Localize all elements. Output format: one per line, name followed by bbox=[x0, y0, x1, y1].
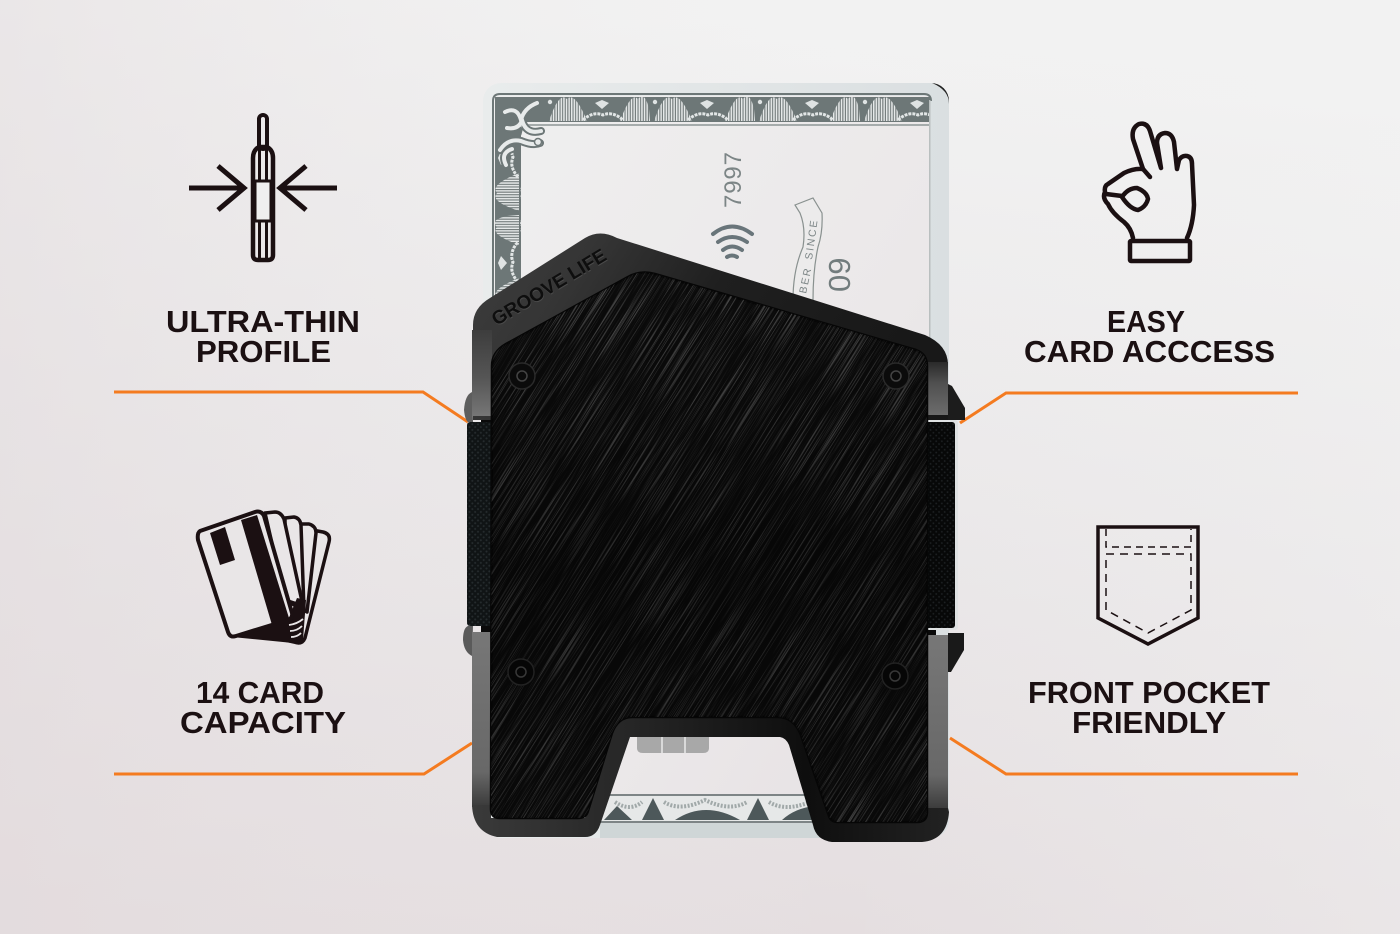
elastic strap right bbox=[925, 420, 958, 630]
screw top right bbox=[883, 363, 909, 389]
screw top left bbox=[509, 363, 535, 389]
engraved brand name: GROOVE LIFE bbox=[489, 246, 611, 331]
heading: ultra-thin profile: ULTRA-THIN bbox=[166, 304, 360, 339]
card chip contacts bbox=[637, 737, 709, 753]
wallet side tabs bbox=[463, 384, 965, 672]
heading: ultra-thin profile: PROFILE bbox=[196, 334, 331, 369]
brushed black plate bbox=[491, 273, 927, 822]
icon: OK hand gesture bbox=[1104, 124, 1194, 261]
wallet rail upper right bbox=[927, 362, 948, 415]
heading: front pocket friendly: FRONT POCKET bbox=[1028, 675, 1270, 710]
heading: 14 card capacity bbox=[180, 675, 346, 740]
card bottom border bbox=[600, 795, 825, 839]
member since ribbon: SINCE bbox=[803, 218, 821, 260]
heading: 14 card capacity: CAPACITY bbox=[180, 705, 346, 740]
heading: easy card access: EASY bbox=[1107, 304, 1185, 339]
leader line: easy card access bbox=[960, 393, 1298, 423]
heading: easy card access: CARD ACCCESS bbox=[1024, 334, 1275, 369]
heading: easy card access bbox=[1024, 304, 1275, 369]
elastic strap left bbox=[467, 422, 494, 626]
heading: 14 card capacity: 14 CARD bbox=[196, 675, 324, 710]
product photo: metal card in wallet bbox=[463, 83, 965, 842]
screw bottom right bbox=[882, 663, 908, 689]
member since ribbon: BER bbox=[797, 266, 815, 295]
metal card bbox=[483, 83, 949, 839]
icon: fanned cards bbox=[198, 512, 329, 644]
heading: ultra-thin profile bbox=[166, 304, 360, 369]
leader line: 14 card capacity bbox=[114, 743, 472, 774]
heading: front pocket friendly bbox=[1028, 675, 1270, 740]
leader line: ultra-thin profile bbox=[114, 392, 468, 422]
icon: ultra-thin profile bbox=[189, 115, 337, 260]
card number: 7997 bbox=[720, 152, 747, 208]
card corner ornament bbox=[495, 97, 545, 165]
wallet rail lower right bbox=[927, 635, 948, 810]
contactless symbol bbox=[713, 226, 752, 257]
wallet rail upper left bbox=[472, 330, 492, 416]
member year: 09 bbox=[822, 258, 857, 292]
heading: front pocket friendly: FRIENDLY bbox=[1072, 705, 1226, 740]
wallet frame top bbox=[473, 234, 948, 420]
member since ribbon bbox=[793, 198, 822, 300]
icon: jeans pocket bbox=[1098, 527, 1198, 644]
wallet rail lower left bbox=[472, 632, 492, 807]
screw bottom left bbox=[508, 659, 534, 685]
wallet frame bottom bbox=[472, 717, 949, 842]
engraved brand name: GROOVE LIFE bbox=[488, 245, 611, 330]
leader line: front pocket friendly bbox=[950, 738, 1298, 774]
gap shadows beside strap bbox=[481, 413, 936, 636]
